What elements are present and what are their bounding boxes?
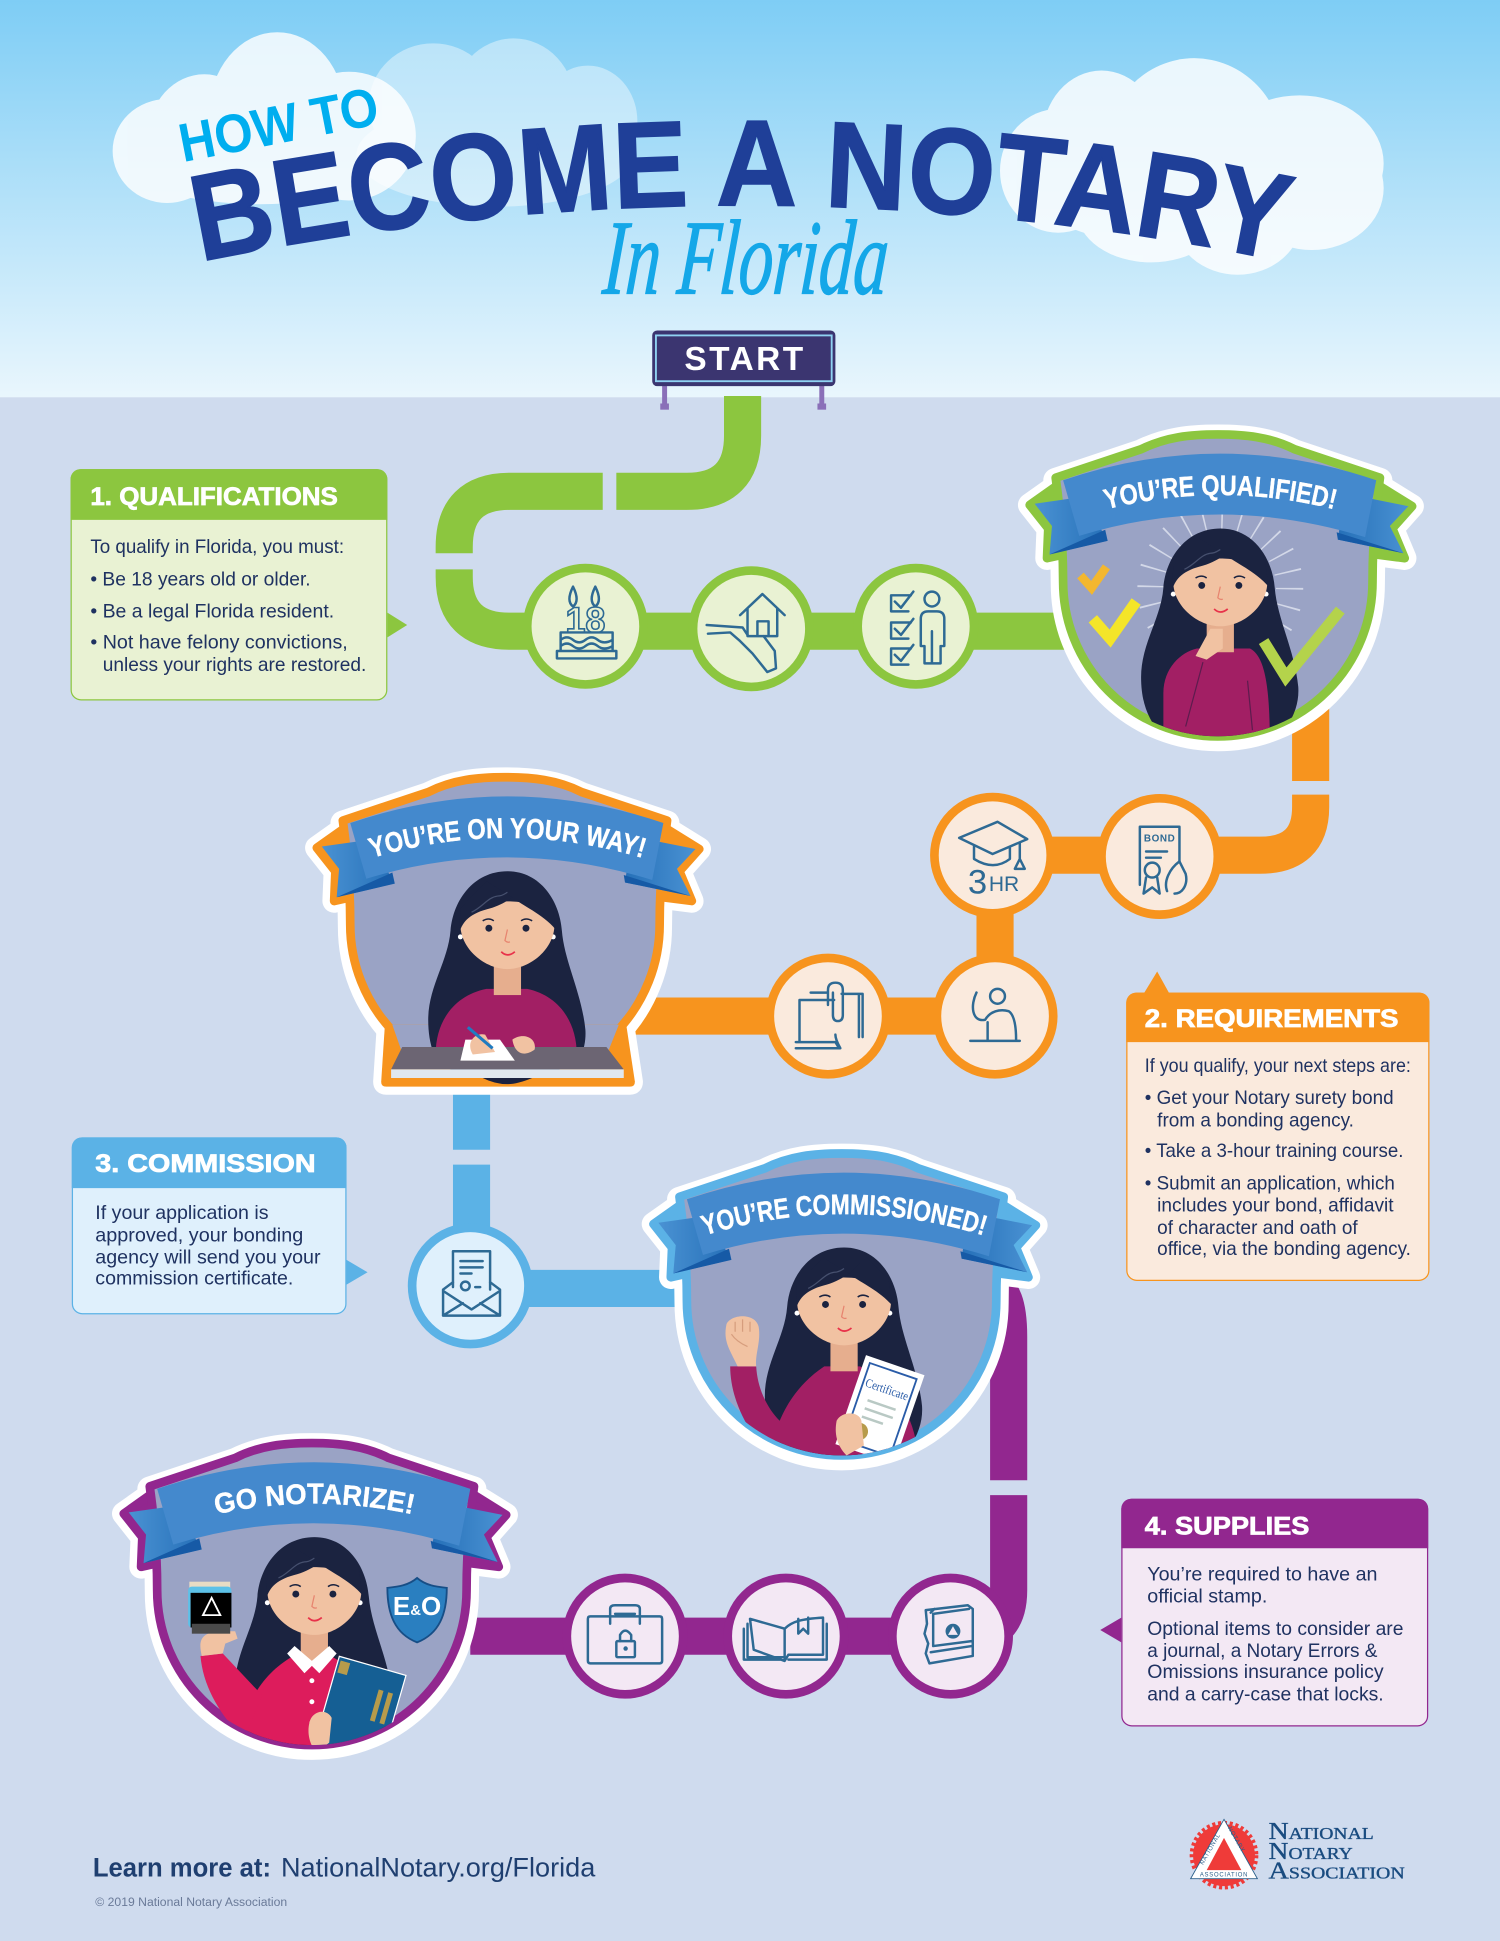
E&O shield [387, 1578, 447, 1642]
icon: checklist and person [858, 568, 974, 684]
icon: bond: BOND [1144, 834, 1175, 845]
panel: qualifications: To qualify in Florida, you must: [90, 537, 344, 558]
banner text: YOU’RE ON YOUR WAY! [366, 818, 646, 858]
panel: requirements: includes your bond, affidavit [1157, 1196, 1394, 1217]
panel: qualifications: unless your rights are restored. [103, 655, 366, 676]
panel: commission: agency will send you your [95, 1248, 321, 1269]
icon: person training [937, 958, 1053, 1074]
title [174, 76, 1297, 317]
icon: graduation cap 3 hour: 3 [968, 864, 987, 902]
start sign: START [684, 341, 806, 378]
logo: national notary association: NATIONAL [1200, 1833, 1222, 1866]
background: sky [0, 0, 1500, 397]
title: how to: HOW TO [174, 76, 383, 174]
purple path [470, 1287, 1009, 1636]
logo: national notary association: NOTARY [1226, 1826, 1246, 1854]
illustration: woman with certificate [725, 1248, 925, 1468]
icon: graduation cap 3 hour: HR [989, 873, 1019, 896]
icon: locked case [567, 1578, 683, 1694]
panel: supplies: 4. SUPPLIES [1145, 1514, 1309, 1541]
panel: requirements: 2. REQUIREMENTS [1145, 1006, 1399, 1033]
badge: you're commissioned [642, 1144, 1048, 1470]
panel: qualifications: • Be a legal Florida resident. [90, 602, 334, 623]
panel: supplies: Omissions insurance policy [1147, 1662, 1384, 1683]
icon: stamp [892, 1578, 1009, 1694]
panel: commission: If your application is [95, 1203, 269, 1224]
panel: supplies: Optional items to consider are [1147, 1619, 1403, 1640]
panel: supplies: a journal, a Notary Errors & [1147, 1641, 1378, 1662]
desk base outline: colour [381, 1025, 635, 1087]
panel: commission [72, 1137, 368, 1314]
desk base outline: white [381, 1025, 635, 1087]
badge: you're qualified [1018, 424, 1424, 752]
icon: journal book [728, 1578, 844, 1694]
panel: supplies: You’re required to have an [1147, 1564, 1377, 1585]
illustration: woman with certificate: Certificate [864, 1376, 911, 1404]
icon: birthday cake: 18 [565, 600, 605, 640]
panel: requirements [1126, 972, 1429, 1280]
panel: commission: commission certificate. [95, 1269, 293, 1290]
panel: commission: approved, your bonding [95, 1225, 303, 1246]
cloud: right [1000, 58, 1384, 275]
panel: requirements: from a bonding agency. [1157, 1110, 1354, 1131]
illustration: woman writing at desk [391, 871, 624, 1085]
cloud: left [113, 32, 416, 204]
icon: birthday cake [527, 568, 644, 684]
panel: qualifications: • Be 18 years old or older. [90, 569, 311, 590]
panel: qualifications: • Not have felony convictions, [90, 633, 348, 654]
icon: envelope with certificate [412, 1228, 528, 1344]
panel: qualifications [71, 469, 407, 700]
logo: national notary association [1191, 1818, 1405, 1887]
panel: requirements: of character and oath of [1157, 1218, 1358, 1239]
panel: commission: 3. COMMISSION [95, 1151, 316, 1178]
logo: national notary association: Notary [1269, 1838, 1353, 1865]
orange path [631, 705, 1311, 1016]
logo: national notary association: National [1269, 1818, 1374, 1845]
badge: you're on your way [305, 767, 711, 1095]
banner text: YOU’RE COMMISSIONED! [699, 1194, 988, 1236]
icon: graduation cap 3 hour [934, 797, 1051, 913]
footer: copyright: © 2019 National Notary Association [95, 1896, 287, 1909]
footer: learn more [93, 1851, 596, 1882]
panel: supplies [1100, 1499, 1428, 1726]
footer: learn more: Learn more at: [93, 1851, 271, 1882]
panel: requirements: office, via the bonding agency. [1157, 1239, 1411, 1260]
panel: requirements: If you qualify, your next steps are: [1145, 1056, 1411, 1077]
badge: go notarize [112, 1433, 518, 1760]
logo: national notary association: Association [1269, 1858, 1405, 1885]
panel: qualifications: 1. QUALIFICATIONS [90, 484, 338, 511]
panel: requirements: • Take a 3-hour training course. [1145, 1141, 1403, 1162]
cloud: back centre [356, 38, 637, 207]
panel: requirements: • Get your Notary surety bond [1145, 1088, 1394, 1109]
stamp [188, 1582, 231, 1634]
footer: learn more: NationalNotary.org/Florida [281, 1851, 596, 1882]
icon: florida home [693, 571, 809, 687]
title: become a notary: BECOME A NOTARY [190, 120, 1297, 261]
title: in florida: In Florida [599, 199, 893, 317]
illustration: woman with stamp and folder [188, 1537, 448, 1746]
panel: supplies: official stamp. [1147, 1587, 1267, 1608]
illustration: thinking woman [1080, 519, 1340, 743]
start sign [652, 330, 835, 410]
panel: requirements: • Submit an application, which [1145, 1173, 1395, 1194]
banner text: GO NOTARIZE! [214, 1483, 414, 1514]
E&O shield: E&O [393, 1591, 441, 1621]
banner text: YOU’RE QUALIFIED! [1102, 475, 1337, 509]
panel: supplies: and a carry-case that locks. [1147, 1685, 1384, 1706]
icon: application documents [770, 958, 886, 1074]
green path [454, 396, 1077, 631]
logo: national notary association: ASSOCIATION [1200, 1872, 1248, 1878]
blue path [472, 1089, 693, 1288]
icon: bond [1101, 798, 1218, 915]
